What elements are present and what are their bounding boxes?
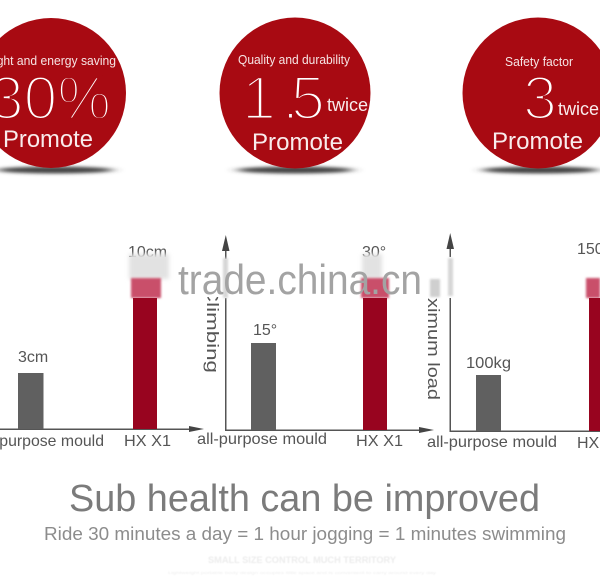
- bar: HX X1 30 degrees: [363, 298, 387, 430]
- badge: quality and durability: [220, 18, 370, 174]
- bar: HX X1 10cm: [133, 298, 157, 429]
- heading: Sub health can be improved: [69, 478, 540, 520]
- badge: safety factor: twice: [558, 99, 599, 119]
- chart: height comparison: 10cm: [128, 244, 167, 261]
- badge: safety factor: Promote: [492, 128, 583, 155]
- badge: quality and durability: 1.5: [242, 64, 325, 132]
- chart: climbing comparison: all-purpose mould: [197, 431, 327, 448]
- chart: height comparison: [0, 244, 204, 450]
- badge: safety factor: 3: [523, 64, 557, 132]
- chart: height comparison: HX X1: [124, 433, 171, 450]
- badge: quality and durability: twice: [327, 95, 368, 115]
- faint caption: SMALL SIZE CONTROL MUCH TERRITORY: [208, 555, 396, 565]
- chart: maximum load comparison: 100kg: [466, 355, 511, 372]
- watermark: trade.china.cn: [129, 254, 600, 303]
- badge: quality and durability: Quality and durability: [238, 53, 351, 67]
- bar: all-purpose mould 15 degrees: [251, 343, 276, 430]
- chart: climbing comparison: 30°: [362, 244, 386, 261]
- subheading: Ride 30 minutes a day = 1 hour jogging = 1 minutes swimming: [44, 524, 566, 544]
- bar: HX X1 150kg: [589, 298, 600, 431]
- faint caption: [168, 555, 436, 575]
- chart: climbing comparison: [197, 235, 434, 450]
- bar: all-purpose mould 100kg: [476, 375, 501, 431]
- chart: climbing comparison: Climbing: [203, 286, 222, 373]
- watermark: trade.china.cn: trade.china.cn: [178, 256, 422, 303]
- chart: climbing comparison: HX X1: [356, 433, 403, 450]
- chart: maximum load comparison: [424, 233, 600, 452]
- chart: maximum load comparison: ximum load: [424, 298, 443, 400]
- chart: climbing comparison: 15°: [253, 322, 277, 339]
- badge: light and energy saving: [0, 18, 126, 174]
- badge: quality and durability: Promote: [252, 129, 343, 156]
- faint caption: Lightweight portable body design occupies little space and is convenient to carry around every day: [168, 570, 436, 575]
- chart: height comparison: 3cm: [18, 349, 48, 366]
- badge: light and energy saving: Promote: [3, 126, 93, 153]
- bar: all-purpose mould 3cm: [18, 373, 44, 429]
- badge: safety factor: Safety factor: [505, 55, 573, 69]
- chart: maximum load comparison: all-purpose mould: [427, 434, 557, 451]
- badge: safety factor: [462, 18, 600, 174]
